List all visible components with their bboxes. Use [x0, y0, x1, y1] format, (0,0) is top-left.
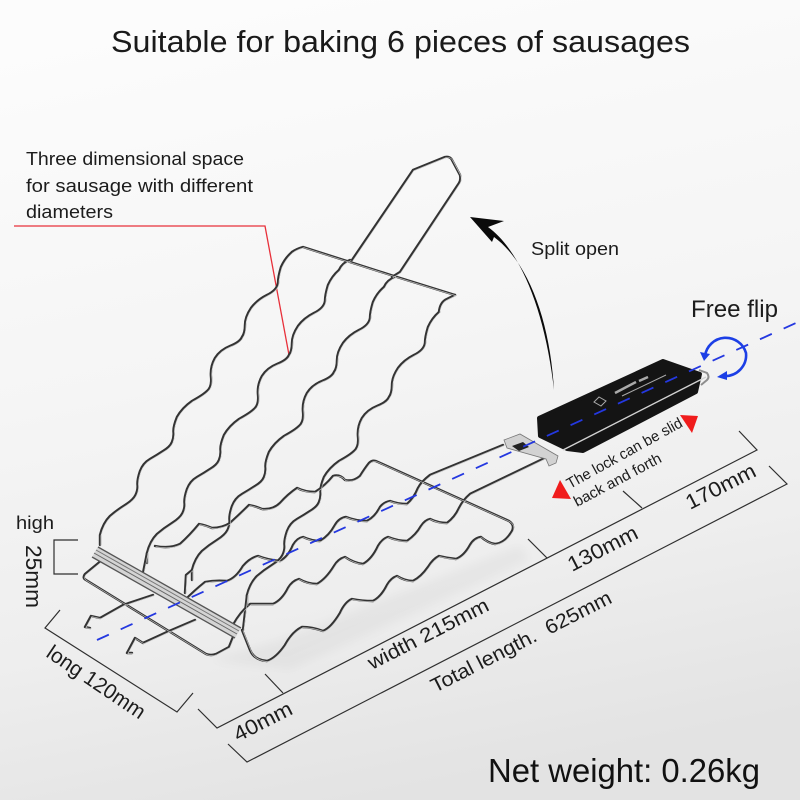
split open label: Split open — [531, 238, 619, 259]
wire grill basket — [84, 157, 548, 662]
callout leader line — [14, 226, 289, 355]
dimension labels: 40mm — [230, 697, 296, 746]
lock label: back and forth — [571, 450, 665, 511]
handle logo marks — [594, 375, 666, 406]
dimension labels: width 215mm — [363, 594, 493, 675]
icon: free flip rotation arrow — [700, 338, 746, 380]
bottom clamp bar — [92, 547, 241, 638]
lock label: The lock can be slid — [564, 415, 686, 492]
handle: black grip — [539, 361, 706, 451]
lock arrows — [552, 415, 698, 499]
free flip label: Free flip — [691, 296, 778, 323]
dimension labels: 170mm — [682, 459, 760, 514]
blue rotation axis — [97, 322, 798, 640]
callout: three dimensional space: for sausage with different — [26, 175, 253, 196]
callout: three dimensional space: diameters — [26, 201, 113, 222]
callout: three dimensional space: Three dimensional space — [26, 148, 244, 169]
handle: metal end loop — [699, 370, 708, 385]
net weight: Net weight: 0.26kg — [488, 752, 760, 789]
dimension labels: 25mm — [21, 545, 46, 608]
dimension labels — [16, 459, 760, 746]
dimension lines — [45, 431, 787, 762]
dimension labels: 130mm — [564, 521, 642, 576]
dimension labels: high — [16, 513, 54, 533]
arrow: split open — [470, 217, 554, 390]
shadow under basket — [210, 545, 530, 670]
handle: sliding lock — [504, 434, 558, 466]
callout: three dimensional space — [26, 148, 253, 222]
title: Suitable for baking 6 pieces of sausages — [111, 24, 690, 59]
dimension labels: Total length. 625mm — [427, 587, 615, 697]
dimension labels: long 120mm — [42, 641, 150, 724]
